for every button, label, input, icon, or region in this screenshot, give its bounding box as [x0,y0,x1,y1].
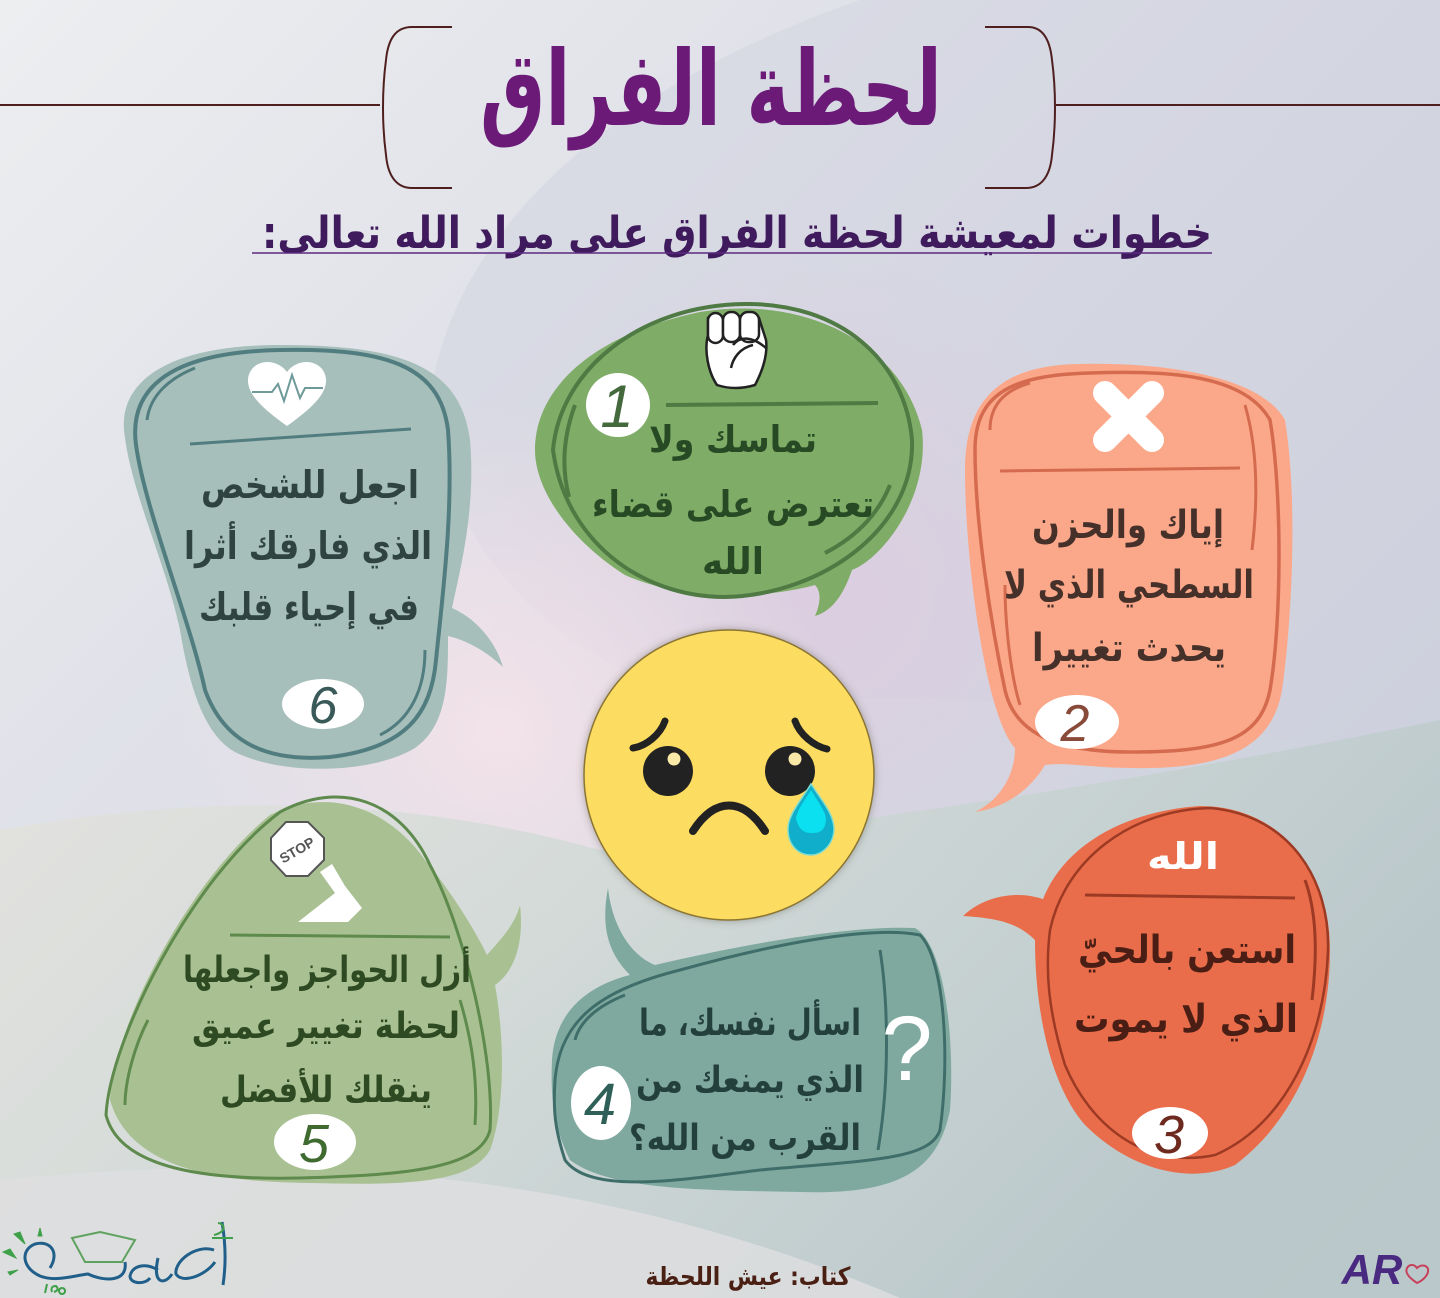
icon: stop sign [271,822,362,922]
text [183,946,471,1111]
text: الذي لا يموت [1074,997,1298,1042]
number 2: 2 [1060,695,1090,753]
text: السطحي الذي لا [1004,563,1254,608]
text [592,418,874,583]
panel: step 2 [965,364,1292,812]
text: تماسك ولا [649,418,817,461]
text: الذي فارقك أثرا [184,521,432,568]
text: في إحياء قلبك [199,585,419,630]
number 6: 6 [309,677,338,735]
icon: stop sign: STOP [277,834,317,866]
text: استعن بالحيّ [1078,928,1296,973]
text: تعترض على قضاء [592,483,874,526]
icon: Allah word: الله [1147,835,1219,878]
subtitle: خطوات لمعيشة لحظة الفراق على مراد الله تعالى: [262,208,1212,259]
text [629,999,864,1159]
text [1004,503,1254,671]
text: اجعل للشخص [201,463,419,507]
text: يحدث تغييرا [1032,626,1226,671]
logo: Osbouha 180 [3,1222,233,1294]
icon: crying face [584,630,874,920]
text: ينقلك للأفضل [220,1067,432,1111]
icon: heart [248,362,326,426]
number 4: 4 [584,1072,616,1137]
number 1: 1 [600,373,634,440]
text: أزل الحواجز واجعلها [183,946,471,991]
number 3: 3 [1154,1105,1184,1165]
number 5: 5 [299,1114,330,1174]
text: إياك والحزن [1032,503,1224,548]
number 4 [571,1066,631,1140]
panel: step 5 [106,797,521,1184]
text: الله [702,540,764,583]
number 2 [1035,695,1119,753]
panel: step 3 [963,806,1330,1174]
logo: AR: AR [1341,1246,1403,1293]
number 3 [1132,1105,1208,1165]
panel: step 4 [552,888,951,1192]
icon: cross [1105,393,1152,440]
icon: fist [706,312,766,388]
text: القرب من الله؟ [629,1118,861,1159]
number 1 [586,373,650,440]
icon: question mark: ? [881,998,933,1100]
panel: step 6 [124,345,503,769]
title: لحظة الفراق [480,28,942,150]
number 5 [274,1114,356,1174]
text: الذي يمنعك من [636,1060,864,1101]
text [1074,928,1298,1042]
source caption: كتاب: عيش اللحظة [646,1262,851,1291]
text: لحظة تغيير عميق [192,1006,460,1047]
number 6 [282,677,364,735]
text [184,463,432,630]
logo: AR [1341,1246,1428,1293]
panel: step 1 [535,304,923,616]
title frame [0,27,1440,188]
text: اسأل نفسك، ما [639,999,861,1044]
